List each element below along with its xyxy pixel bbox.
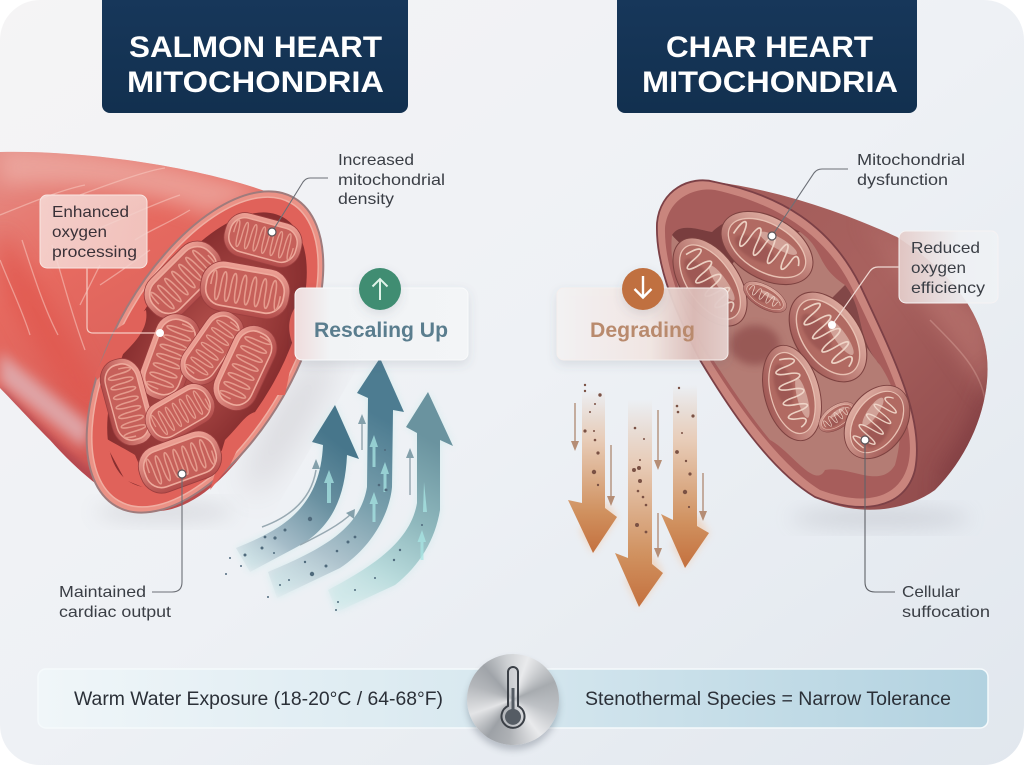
char outer wall bbox=[724, 183, 988, 510]
up arrow right bbox=[328, 392, 453, 612]
rescaling up badge: Rescaling Up bbox=[314, 319, 448, 342]
footer bar: Stenothermal Species = Narrow Tolerance bbox=[585, 689, 951, 710]
icon: up arrow bbox=[359, 268, 401, 310]
arrow glow bbox=[236, 358, 453, 612]
rescaling up badge bbox=[295, 268, 468, 360]
callout: maintained cardiac output: cardiac output bbox=[59, 604, 172, 621]
callout: enhanced oxygen processing bbox=[40, 195, 164, 337]
salmon mitochondria bbox=[95, 208, 307, 499]
callout: maintained cardiac output bbox=[59, 470, 186, 621]
icon: down arrow bbox=[622, 268, 664, 310]
up arrow centre bbox=[268, 358, 404, 598]
callout: mitochondrial dysfunction: dysfunction bbox=[857, 172, 948, 189]
arrow glow bbox=[580, 500, 709, 607]
callout: enhanced oxygen processing: Enhanced bbox=[52, 204, 129, 221]
callout: reduced oxygen efficiency: Reduced bbox=[911, 240, 980, 257]
particles bbox=[225, 449, 423, 611]
down arrow right bbox=[661, 385, 709, 568]
heading: char heart mitochondria bbox=[617, 0, 917, 113]
down arrow centre bbox=[615, 400, 663, 607]
char cross-section bbox=[657, 180, 917, 507]
callout: enhanced oxygen processing: oxygen bbox=[52, 224, 107, 241]
degrading badge bbox=[557, 268, 728, 360]
callout: increased mitochondrial density: density bbox=[338, 191, 394, 208]
char heart illustration bbox=[650, 170, 996, 528]
callout: reduced oxygen efficiency: efficiency bbox=[911, 280, 985, 297]
callout: reduced oxygen efficiency: oxygen bbox=[911, 260, 966, 277]
heading: salmon heart mitochondria bbox=[102, 0, 408, 113]
callout: increased mitochondrial density: mitochondrial bbox=[338, 172, 445, 189]
heading: char heart mitochondria: MITOCHONDRIA bbox=[642, 66, 898, 99]
rising arrows bbox=[225, 358, 453, 612]
salmon cross-section bbox=[38, 153, 372, 551]
falling arrows bbox=[568, 384, 709, 607]
heading: salmon heart mitochondria: MITOCHONDRIA bbox=[127, 66, 384, 99]
callout: mitochondrial dysfunction bbox=[768, 152, 965, 240]
callout: maintained cardiac output: Maintained bbox=[59, 584, 146, 601]
thin arrows bbox=[262, 416, 410, 545]
char mitochondria bbox=[658, 196, 923, 471]
salmon heart muscle illustration bbox=[0, 152, 335, 525]
down arrow left bbox=[568, 390, 617, 553]
callout: cellular suffocation bbox=[861, 436, 990, 621]
light inner arrows bbox=[324, 435, 427, 560]
heading: char heart mitochondria: CHAR HEART bbox=[666, 31, 873, 64]
footer bar: Warm Water Exposure (18-20°C / 64-68°F) bbox=[74, 689, 443, 710]
up arrow left bbox=[236, 405, 359, 572]
heading: salmon heart mitochondria: SALMON HEART bbox=[129, 31, 382, 64]
callout: cellular suffocation: Cellular bbox=[902, 584, 961, 601]
callout: reduced oxygen efficiency bbox=[828, 231, 998, 329]
muscle body bbox=[0, 152, 264, 511]
degrading badge: Degrading bbox=[590, 319, 695, 342]
thin arrows bbox=[575, 403, 703, 553]
callout: increased mitochondrial density bbox=[268, 152, 445, 236]
callout: cellular suffocation: suffocation bbox=[902, 604, 990, 621]
callout: enhanced oxygen processing: processing bbox=[52, 244, 137, 261]
particles bbox=[583, 384, 695, 533]
icon: thermometer medallion bbox=[467, 654, 559, 745]
callout: mitochondrial dysfunction: Mitochondrial bbox=[857, 152, 965, 169]
callout: increased mitochondrial density: Increased bbox=[338, 152, 414, 169]
footer bar bbox=[38, 669, 988, 728]
